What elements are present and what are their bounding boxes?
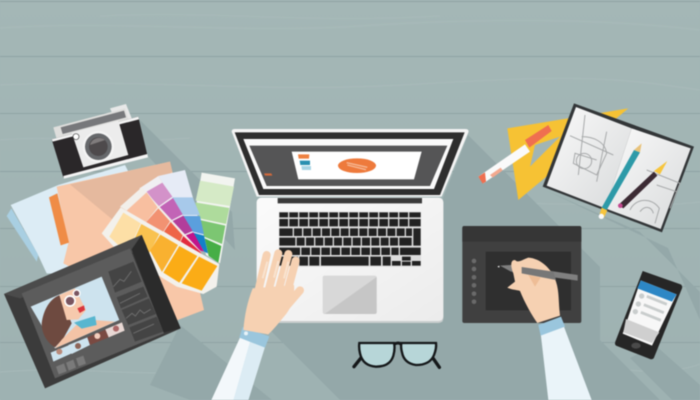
dark pencil	[618, 161, 667, 208]
sketch letters	[570, 115, 680, 223]
left hand and sleeve	[211, 253, 300, 400]
document on screen	[264, 152, 422, 179]
laptop base	[257, 198, 443, 323]
right sleeve	[538, 317, 592, 400]
open sketchbook	[543, 103, 694, 232]
keyboard	[279, 212, 421, 267]
drawing tablet	[462, 226, 581, 323]
tool panels	[108, 262, 163, 342]
tablet	[4, 235, 181, 388]
purple strip	[139, 176, 204, 252]
colour fan swatches	[102, 170, 235, 294]
laptop and left hand group	[211, 129, 469, 400]
tablet buttons	[472, 259, 476, 304]
glasses	[354, 343, 439, 367]
thumbnails	[51, 322, 125, 362]
trackpad	[323, 276, 377, 314]
laptop screen	[232, 129, 469, 197]
photo with portrait	[31, 277, 119, 348]
marker	[478, 125, 552, 184]
yellow set square	[507, 108, 628, 200]
long cast shadows	[140, 120, 700, 400]
right hand with stylus	[497, 258, 578, 323]
tool buttons	[56, 356, 86, 374]
left group	[4, 104, 235, 388]
green strip	[195, 173, 235, 263]
smartphone	[615, 271, 682, 359]
camera	[52, 104, 148, 179]
right group	[462, 103, 694, 400]
blue strip	[158, 170, 208, 253]
red strip	[120, 187, 203, 257]
teal pencil	[599, 143, 642, 219]
peach folder	[49, 162, 204, 322]
yellow strip	[102, 207, 219, 294]
blue folder	[7, 165, 173, 277]
